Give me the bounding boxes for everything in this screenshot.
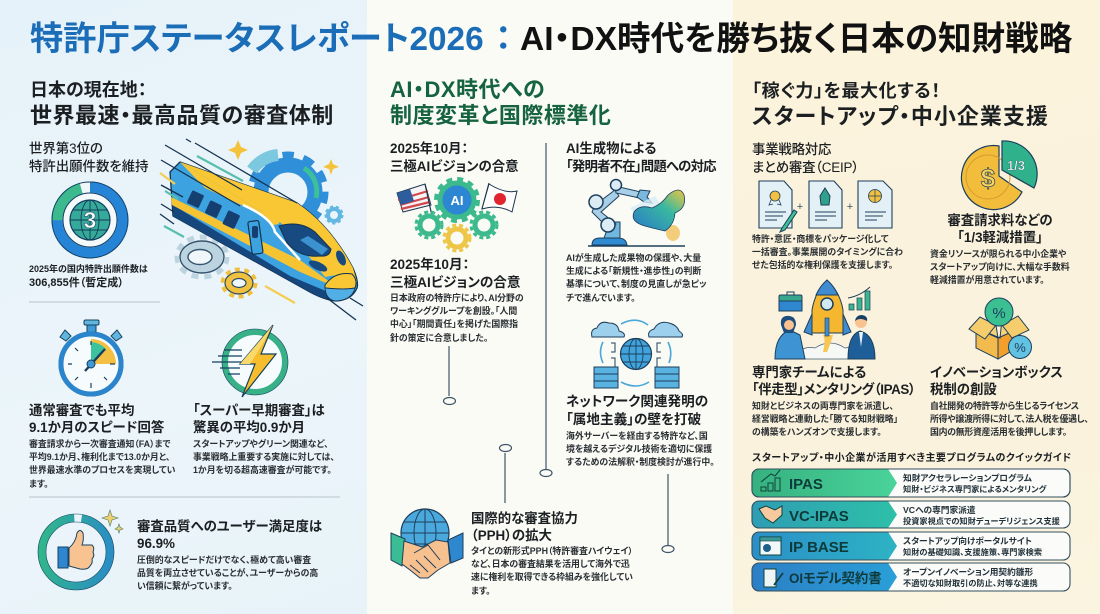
subhead: trilateral vision [390, 141, 519, 174]
block: IPAS mentoring [752, 365, 915, 437]
block: international cooperation PPH: （PPH）の拡大 [471, 528, 552, 543]
title [30, 21, 1072, 58]
icon: coin with one third wedge [961, 141, 1037, 210]
block: innovation box: 税制の創設 [930, 382, 997, 397]
block: one third reduction: 資金リソースが限られる中小企業や [930, 249, 1066, 259]
row: OI model contract: OIモデル契約書 [789, 570, 882, 586]
block: innovation box [930, 365, 1088, 437]
block: trilateral AI vision: 日本政府の特許庁により、AI分野の [390, 293, 524, 303]
block: network inventions: 海外サーバーを経由する特許など、国 [566, 431, 708, 441]
title: AI・DX時代を勝ち抜く日本の知財戦略 [520, 21, 1072, 58]
text: filing count [29, 264, 148, 289]
row: IPAS: 知財・ビジネス専門家によるメンタリング [903, 484, 1047, 494]
block: innovation box: 所得や譲渡所得に対して、法人税を優遇し、 [930, 414, 1088, 424]
icon: flags and AI gears [397, 179, 517, 251]
block: international cooperation PPH: など、日本の審査結果を活用して海外で迅 [471, 559, 630, 569]
block: international cooperation PPH: 国際的な審査協力 [471, 511, 578, 526]
block: one third reduction: スタートアップ向けに、大幅な手数料 [930, 262, 1070, 272]
icon: coin with one third wedge: $ [981, 163, 996, 193]
block: IPAS mentoring: 専門家チームによる [752, 365, 866, 380]
icon: coin with one third wedge: 1/3 [1007, 158, 1025, 173]
icon: robot arm with generated blob [588, 180, 685, 246]
block: one third reduction [930, 213, 1070, 285]
subhead: CEIP: 事業戦略対応 [752, 142, 831, 157]
block: super accelerated examination: 「スーパー早期審査」は [193, 403, 325, 418]
text: CEIP description [752, 234, 903, 270]
text: filing count: 2025年の国内特許出願件数は [29, 264, 148, 274]
panel: AI and DX institutional reform [367, 0, 733, 614]
text: filing count: 306,855件（暫定成） [29, 277, 124, 289]
block: super accelerated examination: 1か月を切る超高速審査が可能です。 [193, 465, 332, 475]
block: super accelerated examination [193, 403, 335, 475]
text: CEIP description: 一括審査。事業展開のタイミングに合わ [752, 247, 903, 257]
subhead: trilateral vision: 2025年10月： [390, 141, 468, 156]
block: user satisfaction: 96.9% [137, 536, 175, 551]
icon: donut world rank 3: 3 [84, 207, 96, 233]
block: trilateral AI vision: ワーキンググループを創設。「人間 [390, 306, 517, 316]
title: ： [495, 21, 512, 58]
panel: current position of Japan [0, 0, 367, 614]
text: AI generated works: チで進んでいます。 [566, 293, 635, 303]
block: trilateral AI vision: 三極AIビジョンの合意 [390, 275, 520, 290]
text: world rank: 世界第3位の [29, 141, 103, 156]
block: user satisfaction: い信頼に繋がっています。 [137, 581, 233, 591]
subhead: CEIP [752, 142, 859, 175]
block: user satisfaction [137, 519, 322, 591]
section heading: current position: 日本の現在地： [30, 80, 147, 100]
row: OI model contract: オープンイノベーション用契約雛形 [903, 566, 1033, 577]
block: international cooperation PPH: タイとの新形式PPH（特許審査ハイウェイ） [471, 546, 633, 556]
block: trilateral AI vision: 針の策定に合意しました。 [390, 333, 488, 343]
icon: thumbs up satisfaction [38, 510, 123, 590]
icon: box with percent badges [969, 298, 1032, 359]
section heading: reform: AI・DX時代への [390, 77, 545, 102]
section heading: startup support: スタートアップ・中小企業支援 [752, 104, 1049, 129]
block: one third reduction: 軽減措置が用意されています。 [930, 275, 1044, 285]
block: user satisfaction: 品質を両立させていることが、ユーザーからの高 [137, 568, 318, 578]
row: IPAS: 知財アクセラレーションプログラム [903, 472, 1032, 483]
row: VC-IPAS: VCへの専門家派遣 [903, 504, 976, 515]
icon: three documents: + [847, 201, 853, 213]
subhead: absent inventor: AI生成物による [566, 141, 656, 156]
block: normal examination speed: 9.1か月のスピード回答 [29, 420, 164, 435]
block: normal examination speed: 世界最速水準のプロセスを実現してい [29, 465, 175, 475]
icon: donut world rank 3 [52, 182, 128, 258]
block: IPAS mentoring: の構築をハンズオンで支援します。 [752, 427, 882, 437]
section heading: reform [390, 77, 611, 128]
icon: rocket with team [775, 280, 875, 359]
block: network inventions [566, 394, 715, 467]
block: network inventions: 「属地主義」の壁を打破 [566, 412, 701, 427]
block: innovation box: 自社開発の特許等から生じるライセンス [930, 401, 1079, 411]
block: one third reduction: 審査請求料などの [947, 213, 1053, 228]
block: normal examination speed: 通常審査でも平均 [29, 403, 134, 418]
text: CEIP description: せた包括的な権利保護を支援します。 [752, 260, 893, 270]
row: VC-IPAS: 投資家視点での知財デューデリジェンス支援 [903, 516, 1061, 526]
block: international cooperation PPH: 速に権利を取得できる枠組みを強化してい [471, 572, 633, 582]
row: VC-IPAS [752, 501, 1070, 528]
block: IPAS mentoring: 「伴走型」メンタリング（IPAS） [752, 382, 915, 397]
section heading: startup support: 「稼ぐ力」を最大化する！ [752, 81, 941, 101]
title: 特許庁ステータスレポート2026 [30, 21, 484, 58]
section heading: startup support [752, 81, 1049, 129]
block: IPAS mentoring: 経営戦略と連動した「勝てる知財戦略」 [752, 414, 898, 424]
row: IP BASE: 知財の基礎知識、支援施策、専門家検索 [903, 547, 1042, 557]
row: OI model contract [752, 563, 1070, 591]
block: super accelerated examination: 事業戦略上重要する実施に対しては、 [193, 452, 335, 462]
block: user satisfaction: 審査品質へのユーザー満足度は [137, 519, 322, 534]
subhead: absent inventor [566, 141, 716, 174]
block: trilateral AI vision [390, 257, 524, 343]
row: IP BASE: スタートアップ向けポータルサイト [903, 535, 1032, 546]
block: innovation box: 国内の無形資産活用を後押しします。 [930, 427, 1067, 437]
icon: cloud network globe [592, 320, 683, 388]
icon: flags and AI gears: AI [450, 193, 464, 208]
text: world rank: 特許出願件数を維持 [29, 159, 148, 174]
row: IP BASE [752, 532, 1070, 560]
block: user satisfaction: 圧倒的なスピードだけでなく、極めて高い審査 [137, 555, 311, 565]
block: innovation box: イノベーションボックス [930, 365, 1063, 380]
block: one third reduction: 「1/3軽減措置」 [957, 230, 1043, 245]
row: IP BASE: IP BASE [789, 539, 849, 556]
icon: box with percent badges: % [992, 305, 1006, 322]
icon: handshake and globe [391, 509, 463, 578]
icon: three documents: + [797, 201, 803, 213]
icon: lightning clock [212, 325, 288, 397]
block: normal examination speed: ます。 [29, 479, 48, 489]
quick guide heading: スタートアップ・中小企業が活用すべき主要プログラムのクイックガイド [752, 453, 1072, 464]
icon: three documents [759, 181, 892, 232]
text: AI generated works [566, 252, 707, 303]
block: international cooperation PPH [471, 511, 633, 596]
section heading: current position: 世界最速・最高品質の審査体制 [30, 103, 334, 128]
subhead: CEIP: まとめ審査（CEIP） [752, 160, 859, 175]
text: CEIP description: 特許・意匠・商標をパッケージ化して [752, 234, 889, 244]
icon: bullet train with gears [160, 139, 363, 320]
row: IPAS: IPAS [789, 476, 823, 493]
icon: stopwatch [59, 320, 123, 396]
text: world rank [29, 141, 148, 174]
block: normal examination speed: 審査請求から一次審査通知（FA）まで [29, 439, 171, 449]
subhead: trilateral vision: 三極AIビジョンの合意 [390, 159, 519, 174]
block: normal examination speed: 平均9.1か月、権利化まで13.0か月と、 [29, 452, 170, 462]
section heading: current position [30, 80, 334, 128]
text: AI generated works: AIが生成した成果物の保護や、大量 [566, 253, 701, 263]
icon: box with percent badges: % [1014, 340, 1026, 355]
block: network inventions: ネットワーク関連発明の [566, 394, 708, 409]
row: OI model contract: 不適切な知財取引の防止、対等な連携 [903, 578, 1038, 588]
section heading: reform: 制度変革と国際標準化 [390, 103, 611, 128]
text: AI generated works: 生成による「新規性・進歩性」の判断 [566, 266, 701, 276]
block: trilateral AI vision: 中心」「期間責任」を掲げた国際指 [390, 319, 518, 329]
text: AI generated works: 基準について、制度の見直しが急ピッ [566, 279, 707, 289]
block: super accelerated examination: 驚異の平均0.9か月 [193, 420, 305, 435]
row: IPAS [752, 469, 1070, 497]
block: network inventions: 境を越えるデジタル技術を適切に保護 [566, 444, 712, 454]
block: trilateral AI vision: 2025年10月： [390, 257, 469, 272]
block: normal examination speed [29, 403, 175, 489]
panel: startup and SME support [733, 0, 1100, 614]
block: international cooperation PPH: ます。 [471, 586, 490, 596]
block: super accelerated examination: スタートアップやグリーン関連など、 [193, 439, 328, 449]
row: VC-IPAS: VC-IPAS [789, 508, 849, 525]
block: IPAS mentoring: 知財とビジネスの両専門家を派遣し、 [752, 401, 894, 411]
block: network inventions: するための法解釈・制度検討が進行中。 [566, 457, 715, 467]
timeline connectors [444, 143, 674, 552]
subhead: absent inventor: 「発明者不在」問題への対応 [566, 159, 716, 174]
